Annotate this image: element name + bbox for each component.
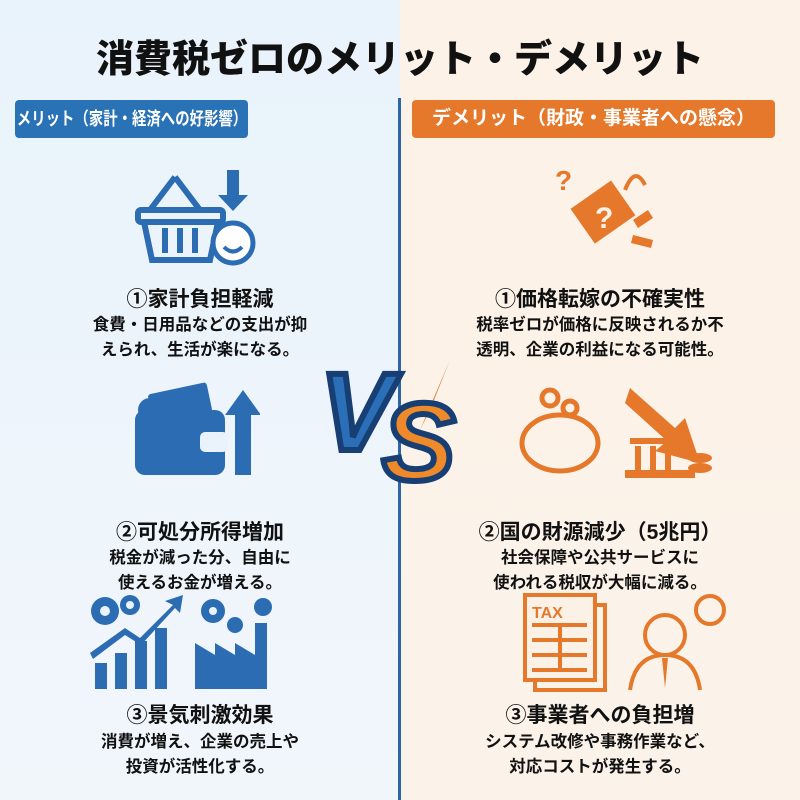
label: merit (15, 100, 248, 138)
demerit3 text (485, 732, 715, 776)
demerit3 text: 対応コストが発生する。 (509, 758, 691, 776)
item2 heading: ②可処分所得増加 (116, 521, 284, 544)
item2 text: 使えるお金が増える。 (118, 574, 282, 592)
item3 text: 投資が活性化する。 (126, 758, 274, 776)
demerit2 heading: ②国の財源減少（5兆円） (479, 521, 721, 544)
icon: piggy bank and govt (520, 388, 712, 478)
label: merit: メリット（家計・経済への好影響） (16, 109, 247, 129)
icon: tax docs and worried person: TAX (532, 605, 563, 622)
VS emblem: V (320, 351, 402, 474)
demerit2 text: 使われる税収が大幅に減る。 (493, 574, 707, 592)
item2 text (109, 548, 291, 592)
item3 text (101, 732, 299, 776)
icon: tax docs and worried person (523, 593, 726, 692)
VS emblem: S (382, 381, 455, 504)
item2 text: 税金が減った分、自由に (109, 549, 291, 567)
demerit1 text (476, 316, 724, 359)
item3 text: 消費が増え、企業の売上や (101, 733, 299, 751)
item1 heading: ①家計負担軽減 (126, 288, 274, 311)
item1 text: えられ、生活が楽になる。 (101, 341, 299, 359)
icon: wallet (135, 382, 260, 475)
title: 消費税ゼロのメリット・デメリット (96, 39, 704, 81)
item1 text (93, 316, 307, 359)
demerit2 text (493, 548, 707, 592)
label: demerit (412, 100, 775, 138)
demerit2 text: 社会保障や公共サービスに (501, 549, 699, 567)
divider (398, 98, 401, 800)
demerit1 heading: ①価格転嫁の不確実性 (495, 288, 705, 311)
item3 heading: ③景気刺激効果 (126, 704, 274, 727)
demerit3 heading: ③事業者への負担増 (506, 704, 694, 727)
icon: growth factory (90, 595, 272, 689)
demerit1 text: 税率ゼロが価格に反映されるか不 (476, 316, 724, 334)
item1 text: 食費・日用品などの支出が抑 (93, 316, 307, 334)
icon: price tag (555, 165, 653, 248)
demerit3 text: システム改修や事務作業など、 (485, 733, 715, 751)
icon: price tag: ? (555, 165, 572, 196)
VS emblem (320, 351, 458, 504)
icon: price tag: ? (595, 202, 613, 235)
icon: basket (135, 170, 256, 266)
demerit1 text: 透明、企業の利益になる可能性。 (476, 341, 724, 359)
label: demerit: デメリット（財政・事業者への懸念） (432, 108, 755, 129)
